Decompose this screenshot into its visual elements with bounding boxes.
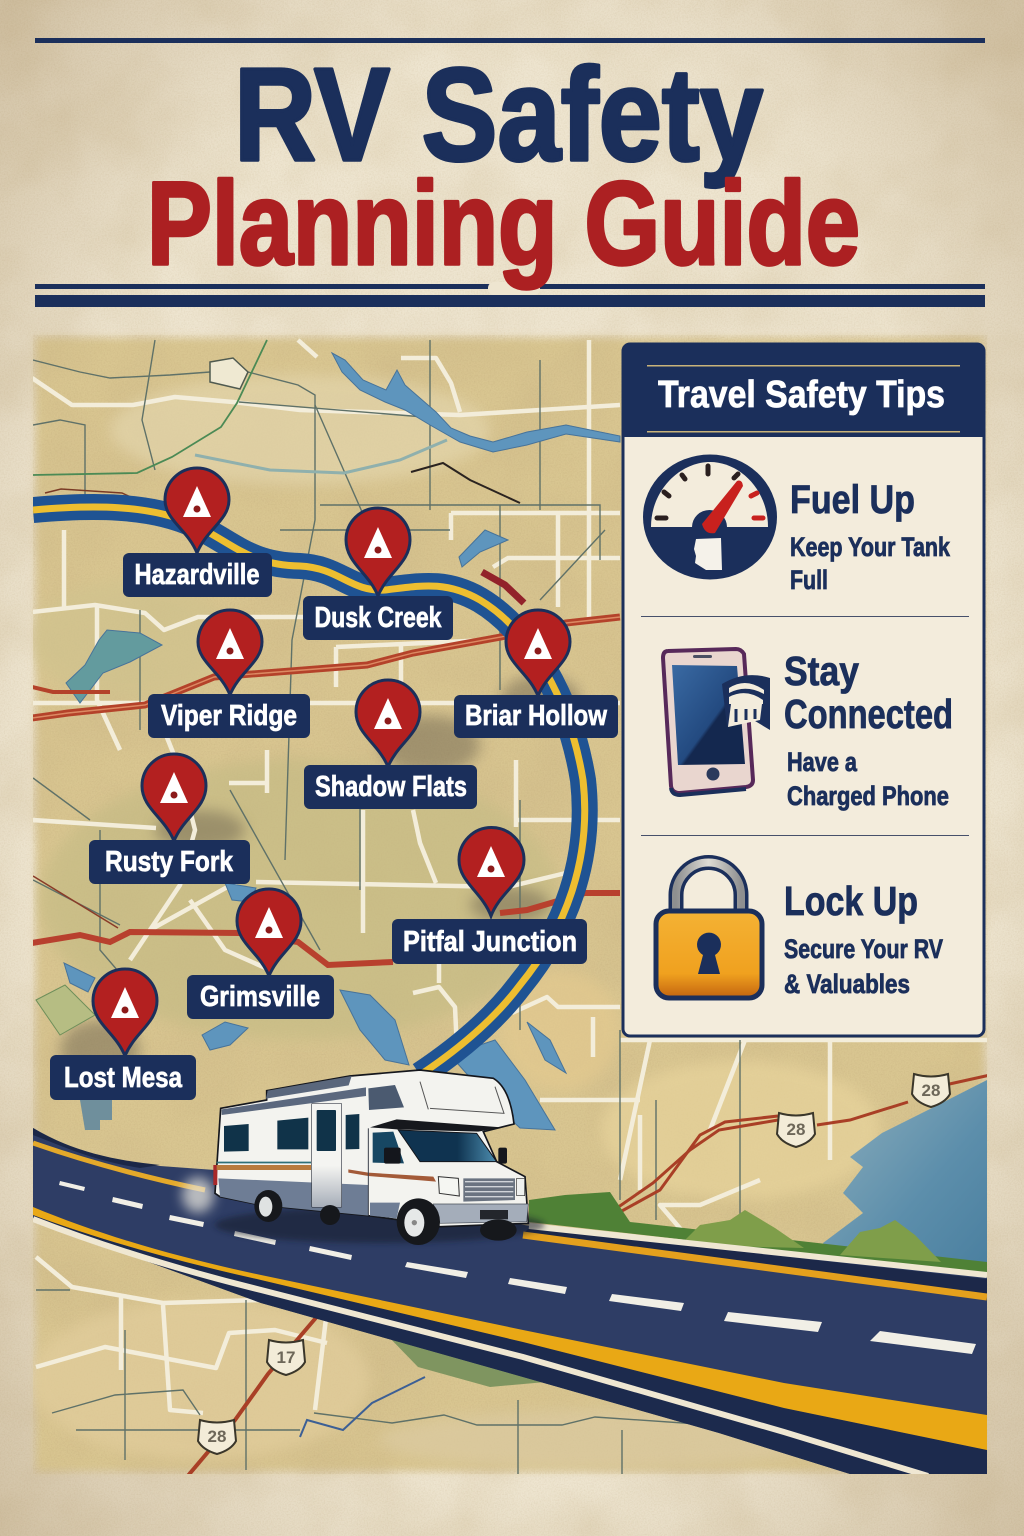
label [123, 553, 272, 597]
shield 17: 17 [277, 1348, 295, 1367]
tip: stay connected [663, 648, 953, 811]
pin: Briar Hollow [454, 610, 618, 738]
label [304, 765, 477, 809]
red highway lower [32, 893, 620, 965]
white minor roads [32, 340, 987, 1413]
shield 28 bottom [198, 1420, 236, 1454]
title: RV Safety: RV Safety [234, 41, 763, 188]
panel header: Travel Safety Tips [658, 374, 945, 416]
river [300, 1377, 425, 1437]
pin: Viper Ridge [148, 610, 310, 738]
terrain shadows [60, 675, 580, 1080]
label [148, 694, 310, 738]
label: Briar Hollow [465, 700, 607, 732]
text: lock up [784, 878, 943, 999]
text: lock up: Secure Your RV [784, 934, 943, 964]
text: stay connected: Connected [784, 691, 953, 737]
highway road [33, 1128, 987, 1476]
pin: Hazardville [123, 468, 272, 597]
shield 28 right: 28 [922, 1081, 940, 1100]
panel: travel safety tips [623, 344, 984, 1036]
label [89, 840, 250, 884]
text: stay connected: Have a [787, 747, 858, 777]
text: fuel up: Fuel Up [790, 478, 915, 522]
icon: padlock [656, 862, 762, 998]
crop field [36, 985, 95, 1035]
text: fuel up: Full [790, 565, 828, 595]
title block [35, 38, 985, 307]
lower green patch [392, 1340, 542, 1387]
label: Rusty Fork [105, 846, 234, 878]
icon: fuel gauge [643, 454, 777, 580]
text: stay connected [784, 648, 953, 811]
RV rear dust and ground shadow [182, 1177, 545, 1243]
label [454, 695, 618, 738]
pin: Rusty Fork [89, 754, 250, 884]
pin: Dusk Creek [303, 508, 453, 640]
small town [80, 1100, 112, 1130]
label [392, 919, 587, 964]
pin: Pitfal Junction [392, 828, 587, 964]
roadside bushes [529, 1192, 987, 1274]
text: stay connected: Stay [784, 648, 859, 694]
label: Dusk Creek [314, 602, 442, 634]
red highway far right [614, 1075, 990, 1212]
red highway bottom [186, 1313, 320, 1478]
panel header [623, 344, 984, 437]
pin: Shadow Flats [304, 680, 477, 809]
label: Hazardville [134, 559, 260, 591]
road map [30, 335, 990, 1478]
text: fuel up: Keep Your Tank [790, 532, 951, 562]
label: Viper Ridge [161, 700, 297, 732]
icon: phone [663, 649, 770, 795]
red highway upper [32, 617, 620, 718]
map soft base [36, 338, 984, 1471]
label [303, 596, 453, 640]
title: Planning Guide: Planning Guide [147, 158, 860, 290]
label: Pitfal Junction [403, 926, 577, 958]
map tint patches [30, 375, 880, 1470]
RV wheels [254, 1190, 517, 1245]
thin map lines [33, 340, 751, 1474]
motorhome RV [213, 1070, 528, 1245]
label: Shadow Flats [315, 771, 467, 803]
shield 28 right [912, 1074, 950, 1107]
shield 28 mid: 28 [787, 1120, 805, 1139]
highway shields [198, 1074, 950, 1454]
tip: fuel up [643, 454, 951, 595]
pin: Grimsville [187, 889, 334, 1019]
pin: Lost Mesa [50, 969, 196, 1100]
text: fuel up [790, 478, 951, 595]
text: stay connected: Charged Phone [787, 781, 949, 811]
label: Grimsville [200, 981, 320, 1013]
shield 17 [267, 1340, 305, 1375]
label [50, 1055, 196, 1100]
label [187, 975, 334, 1019]
RV body [215, 1070, 528, 1227]
lane dashes [59, 1181, 976, 1354]
route blue and yellow [33, 507, 585, 1075]
text: lock up: & Valuables [784, 969, 910, 999]
shield 28 bottom: 28 [208, 1427, 226, 1446]
lower road band [33, 1215, 987, 1474]
label: Lost Mesa [64, 1062, 183, 1094]
shield 28 mid [777, 1113, 815, 1147]
tip: lock up [656, 862, 943, 999]
text: lock up: Lock Up [784, 878, 918, 924]
lakes and water [64, 353, 987, 1272]
icon: building badge [722, 675, 770, 730]
